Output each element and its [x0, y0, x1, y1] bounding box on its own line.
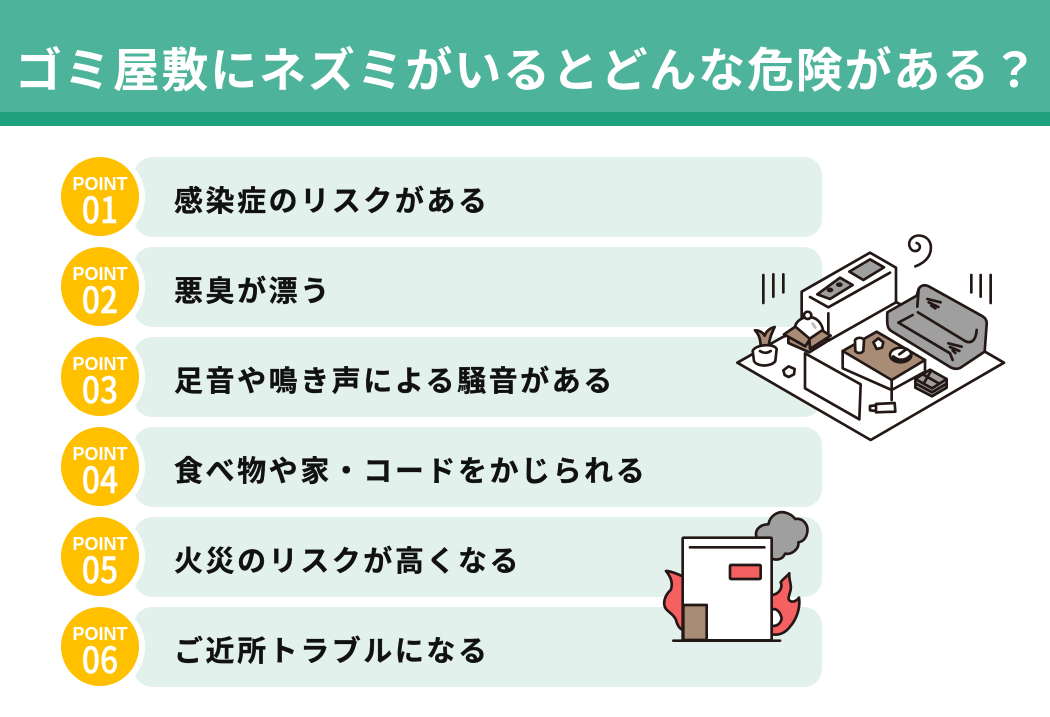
point 04 badge: POINT	[72, 444, 128, 464]
point 02 row	[61, 247, 822, 327]
point 06 ring	[55, 602, 145, 692]
point 02 badge	[61, 247, 139, 326]
point 06 row	[61, 607, 822, 687]
book stack	[915, 370, 947, 396]
point 05 text: 火災のリスクが高くなる	[174, 538, 521, 580]
point 04 bar	[134, 427, 822, 507]
point 03 text: 足音や鳴き声による騒音がある	[174, 358, 615, 400]
door	[683, 605, 707, 640]
illustration: burning house	[664, 512, 807, 641]
point 04 badge: 04	[82, 452, 118, 504]
point 06 badge: 06	[82, 632, 118, 684]
sink	[849, 259, 884, 280]
ground line	[673, 637, 780, 645]
point 01 row	[61, 157, 822, 237]
point 06 badge: POINT	[72, 624, 128, 644]
left flame	[664, 571, 683, 630]
crumpled paper on table	[873, 338, 883, 349]
point 05 badge: POINT	[72, 534, 128, 554]
coffee table	[843, 332, 925, 400]
point 05 ring	[55, 512, 145, 602]
room floor	[737, 302, 1004, 440]
header accent band	[0, 112, 1050, 126]
point 01 badge: 01	[82, 182, 118, 234]
title: ゴミ屋敷にネズミがいるとどんな危険がある？	[15, 32, 1040, 101]
cup	[855, 338, 864, 353]
point 04 text: 食べ物や家・コードをかじられる	[174, 448, 647, 490]
point 03 badge: 03	[82, 362, 118, 414]
point 03 badge: POINT	[72, 354, 128, 374]
point 02 text: 悪臭が漂う	[174, 268, 332, 310]
smoke cloud	[756, 512, 807, 560]
point 01 badge: POINT	[72, 174, 128, 194]
point 03 badge	[61, 337, 139, 416]
point 01 ring	[55, 152, 145, 242]
point 01 bar	[134, 157, 822, 237]
trash bag in box	[784, 312, 831, 352]
point 05 bar	[134, 517, 822, 597]
stove	[817, 278, 853, 299]
partition panel	[805, 353, 861, 419]
illustration: messy room	[737, 236, 1004, 440]
point 02 bar	[134, 247, 822, 327]
vibration lines left	[763, 274, 783, 303]
point 06 bar	[134, 607, 822, 687]
point 06 text: ご近所トラブルになる	[174, 628, 490, 670]
point 01 text: 感染症のリスクがある	[174, 178, 490, 220]
right flame	[772, 573, 799, 635]
point 05 badge: 05	[82, 542, 118, 594]
point 02 ring	[55, 242, 145, 332]
kitchen counter	[802, 253, 896, 341]
point 06 badge	[61, 607, 139, 686]
plate	[890, 348, 911, 362]
discarded bottle	[870, 403, 895, 412]
point 04 row	[61, 427, 822, 507]
point 05 row	[61, 517, 822, 597]
point 03 ring	[55, 332, 145, 422]
vibration lines right	[971, 275, 991, 303]
header banner	[0, 0, 1050, 126]
point 01 badge	[61, 157, 139, 236]
point 03 bar	[134, 337, 822, 417]
point 05 badge	[61, 517, 139, 596]
smell swirl	[909, 236, 931, 266]
point 03 row	[61, 337, 818, 417]
building	[683, 538, 772, 640]
point 04 badge	[61, 427, 139, 506]
sofa	[887, 285, 987, 369]
crumpled paper	[783, 366, 795, 377]
point 04 ring	[55, 422, 145, 512]
potted plant	[753, 327, 777, 365]
point 02 badge: 02	[82, 272, 118, 324]
red sign	[730, 565, 761, 579]
point 02 badge: POINT	[72, 264, 128, 284]
